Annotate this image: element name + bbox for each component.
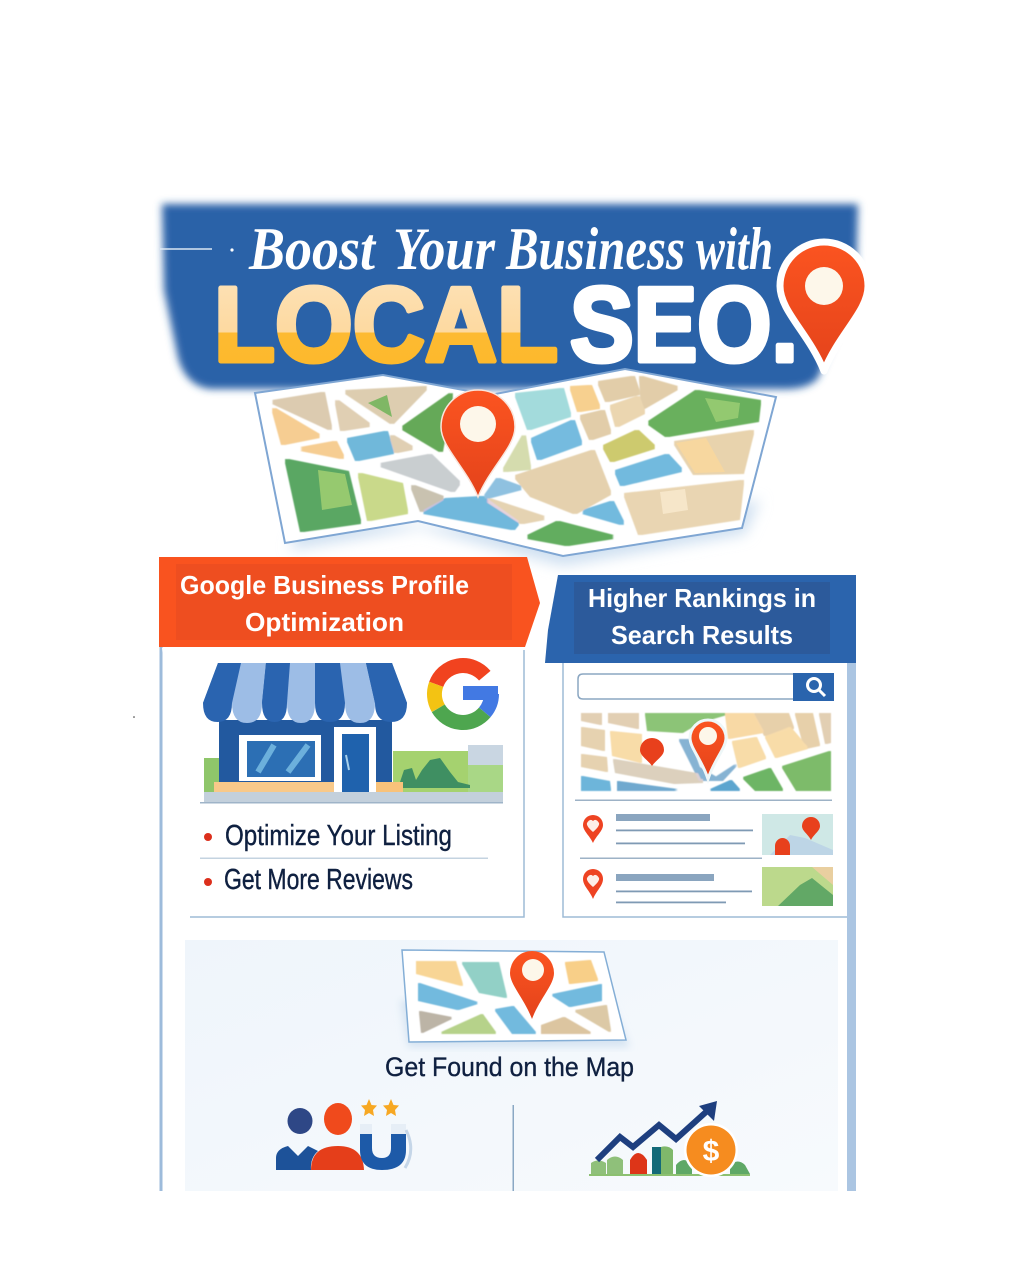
right edge rail — [847, 663, 856, 1191]
title line: Boost Your Business with: Your — [393, 216, 496, 282]
panel: Higher Rankings in Search Results — [545, 575, 856, 917]
panel header: blue ribbon: Search Results — [611, 620, 793, 650]
title line: Boost Your Business with — [248, 216, 773, 282]
bullet list: Get More Reviews — [224, 864, 413, 896]
icon: small map's pin — [510, 951, 554, 1019]
icon: title location pin — [780, 242, 868, 371]
title word: LOCAL: LOCAL — [214, 266, 558, 384]
heading: Get Found on the Map — [385, 1052, 634, 1082]
bullet list: Optimize Your Listing — [225, 820, 452, 852]
title line: Boost Your Business with: with — [696, 216, 773, 282]
panel header: blue ribbon — [545, 575, 856, 663]
icon: small map pin — [640, 738, 664, 766]
banner: blue title background — [160, 204, 858, 389]
icon: customers and magnet — [276, 1099, 411, 1170]
result row 2 — [580, 858, 833, 906]
left edge rail — [160, 647, 162, 1191]
panel header: blue ribbon: Higher Rankings in — [588, 583, 816, 613]
panel header: orange ribbon: Optimization — [245, 607, 404, 637]
panel header: orange ribbon: Google Business Profile — [180, 570, 469, 600]
icon: growth chart with dollar coin — [589, 1101, 750, 1177]
hero folded map — [255, 369, 776, 566]
icon: hero map pin — [441, 390, 515, 497]
results map — [582, 714, 830, 790]
panel: Google Business Profile Optimization — [159, 557, 540, 917]
panel: Get Found on the Map — [185, 940, 838, 1191]
title line: Boost Your Business with: Boost — [248, 216, 377, 282]
title line: Boost Your Business with: Business — [505, 216, 685, 282]
small folded map — [400, 950, 630, 1047]
result row 1 — [575, 800, 833, 855]
title word: SEO.: SEO. — [570, 266, 798, 384]
icon: large map pin — [690, 720, 726, 779]
icon: Google G logo — [434, 666, 498, 722]
panel header: orange ribbon — [159, 557, 540, 647]
bullet list — [200, 820, 488, 896]
search bar — [578, 673, 834, 701]
illustration: storefront — [200, 663, 503, 804]
icon: growth chart with dollar coin: $ — [703, 1135, 720, 1168]
